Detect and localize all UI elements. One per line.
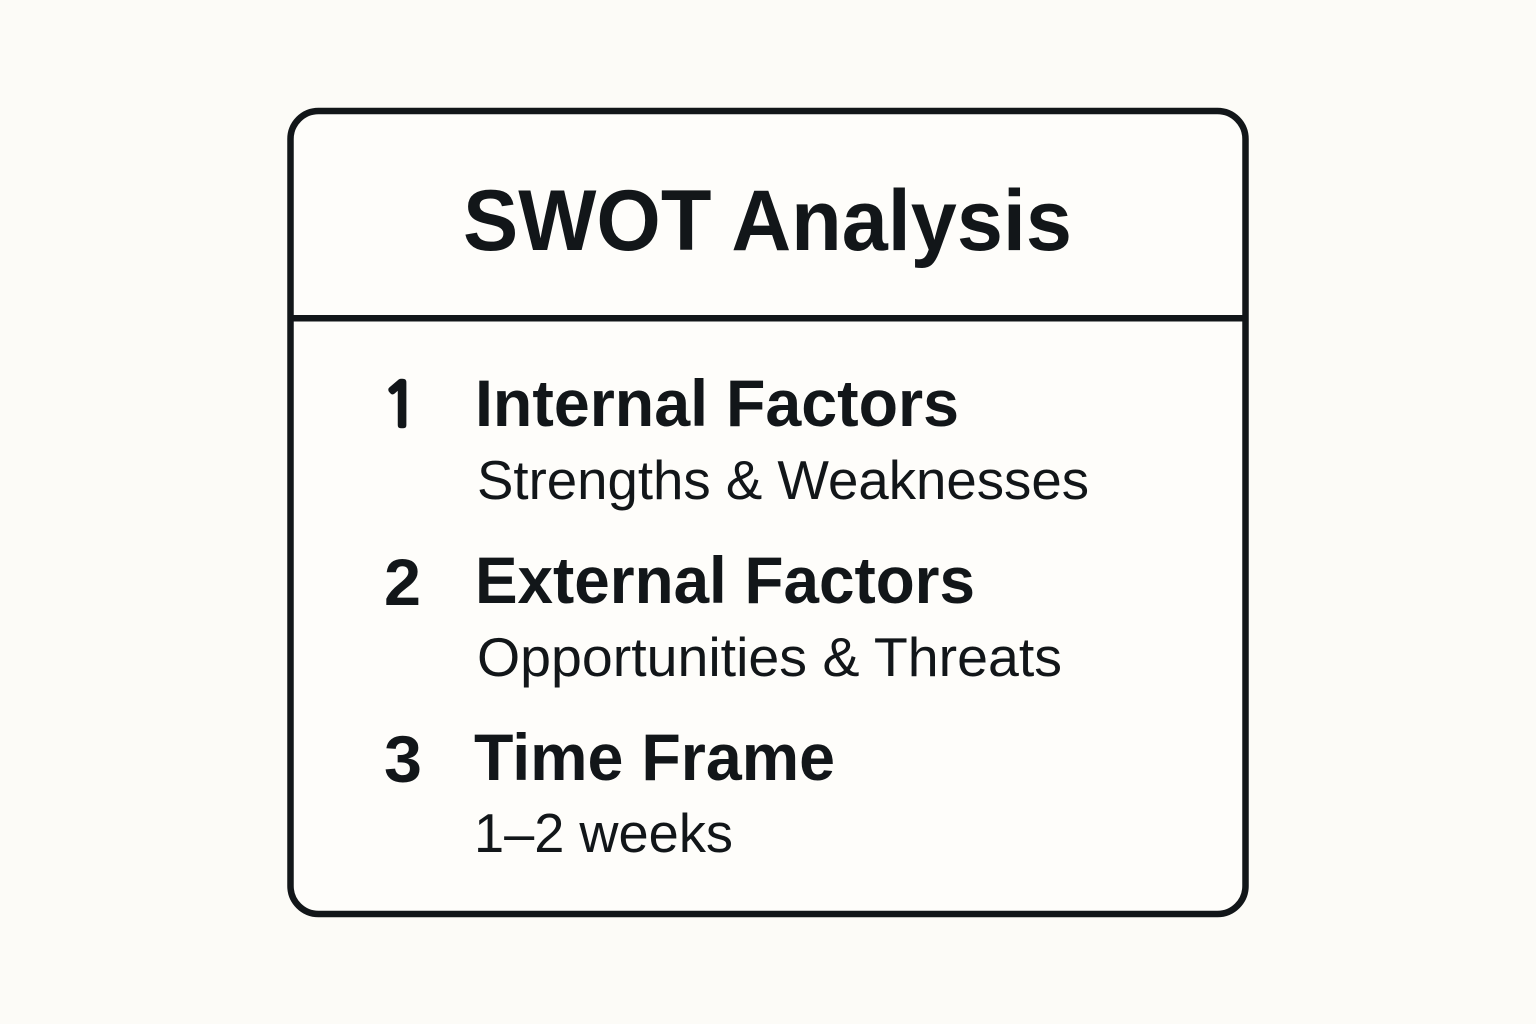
item 2: external factors [384,543,1062,688]
item 1: internal factors [382,366,1089,511]
item 3: time frame: Time Frame [474,720,835,794]
item 1: internal factors: 1 [382,375,418,435]
item 3: time frame [384,720,835,864]
item 3: time frame: 1–2 weeks [474,802,733,864]
item 2: external factors: 2 [384,545,421,619]
item 2: external factors: External Factors [475,543,975,617]
item 1: internal factors: Strengths & Weaknesses [477,449,1089,511]
panel: SWOT card [290,111,1246,914]
item 1: internal factors: Internal Factors [475,366,959,440]
title: SWOT Analysis [463,173,1072,269]
item 2: external factors: Opportunities & Threats [477,626,1062,688]
item 3: time frame: 3 [384,722,422,796]
